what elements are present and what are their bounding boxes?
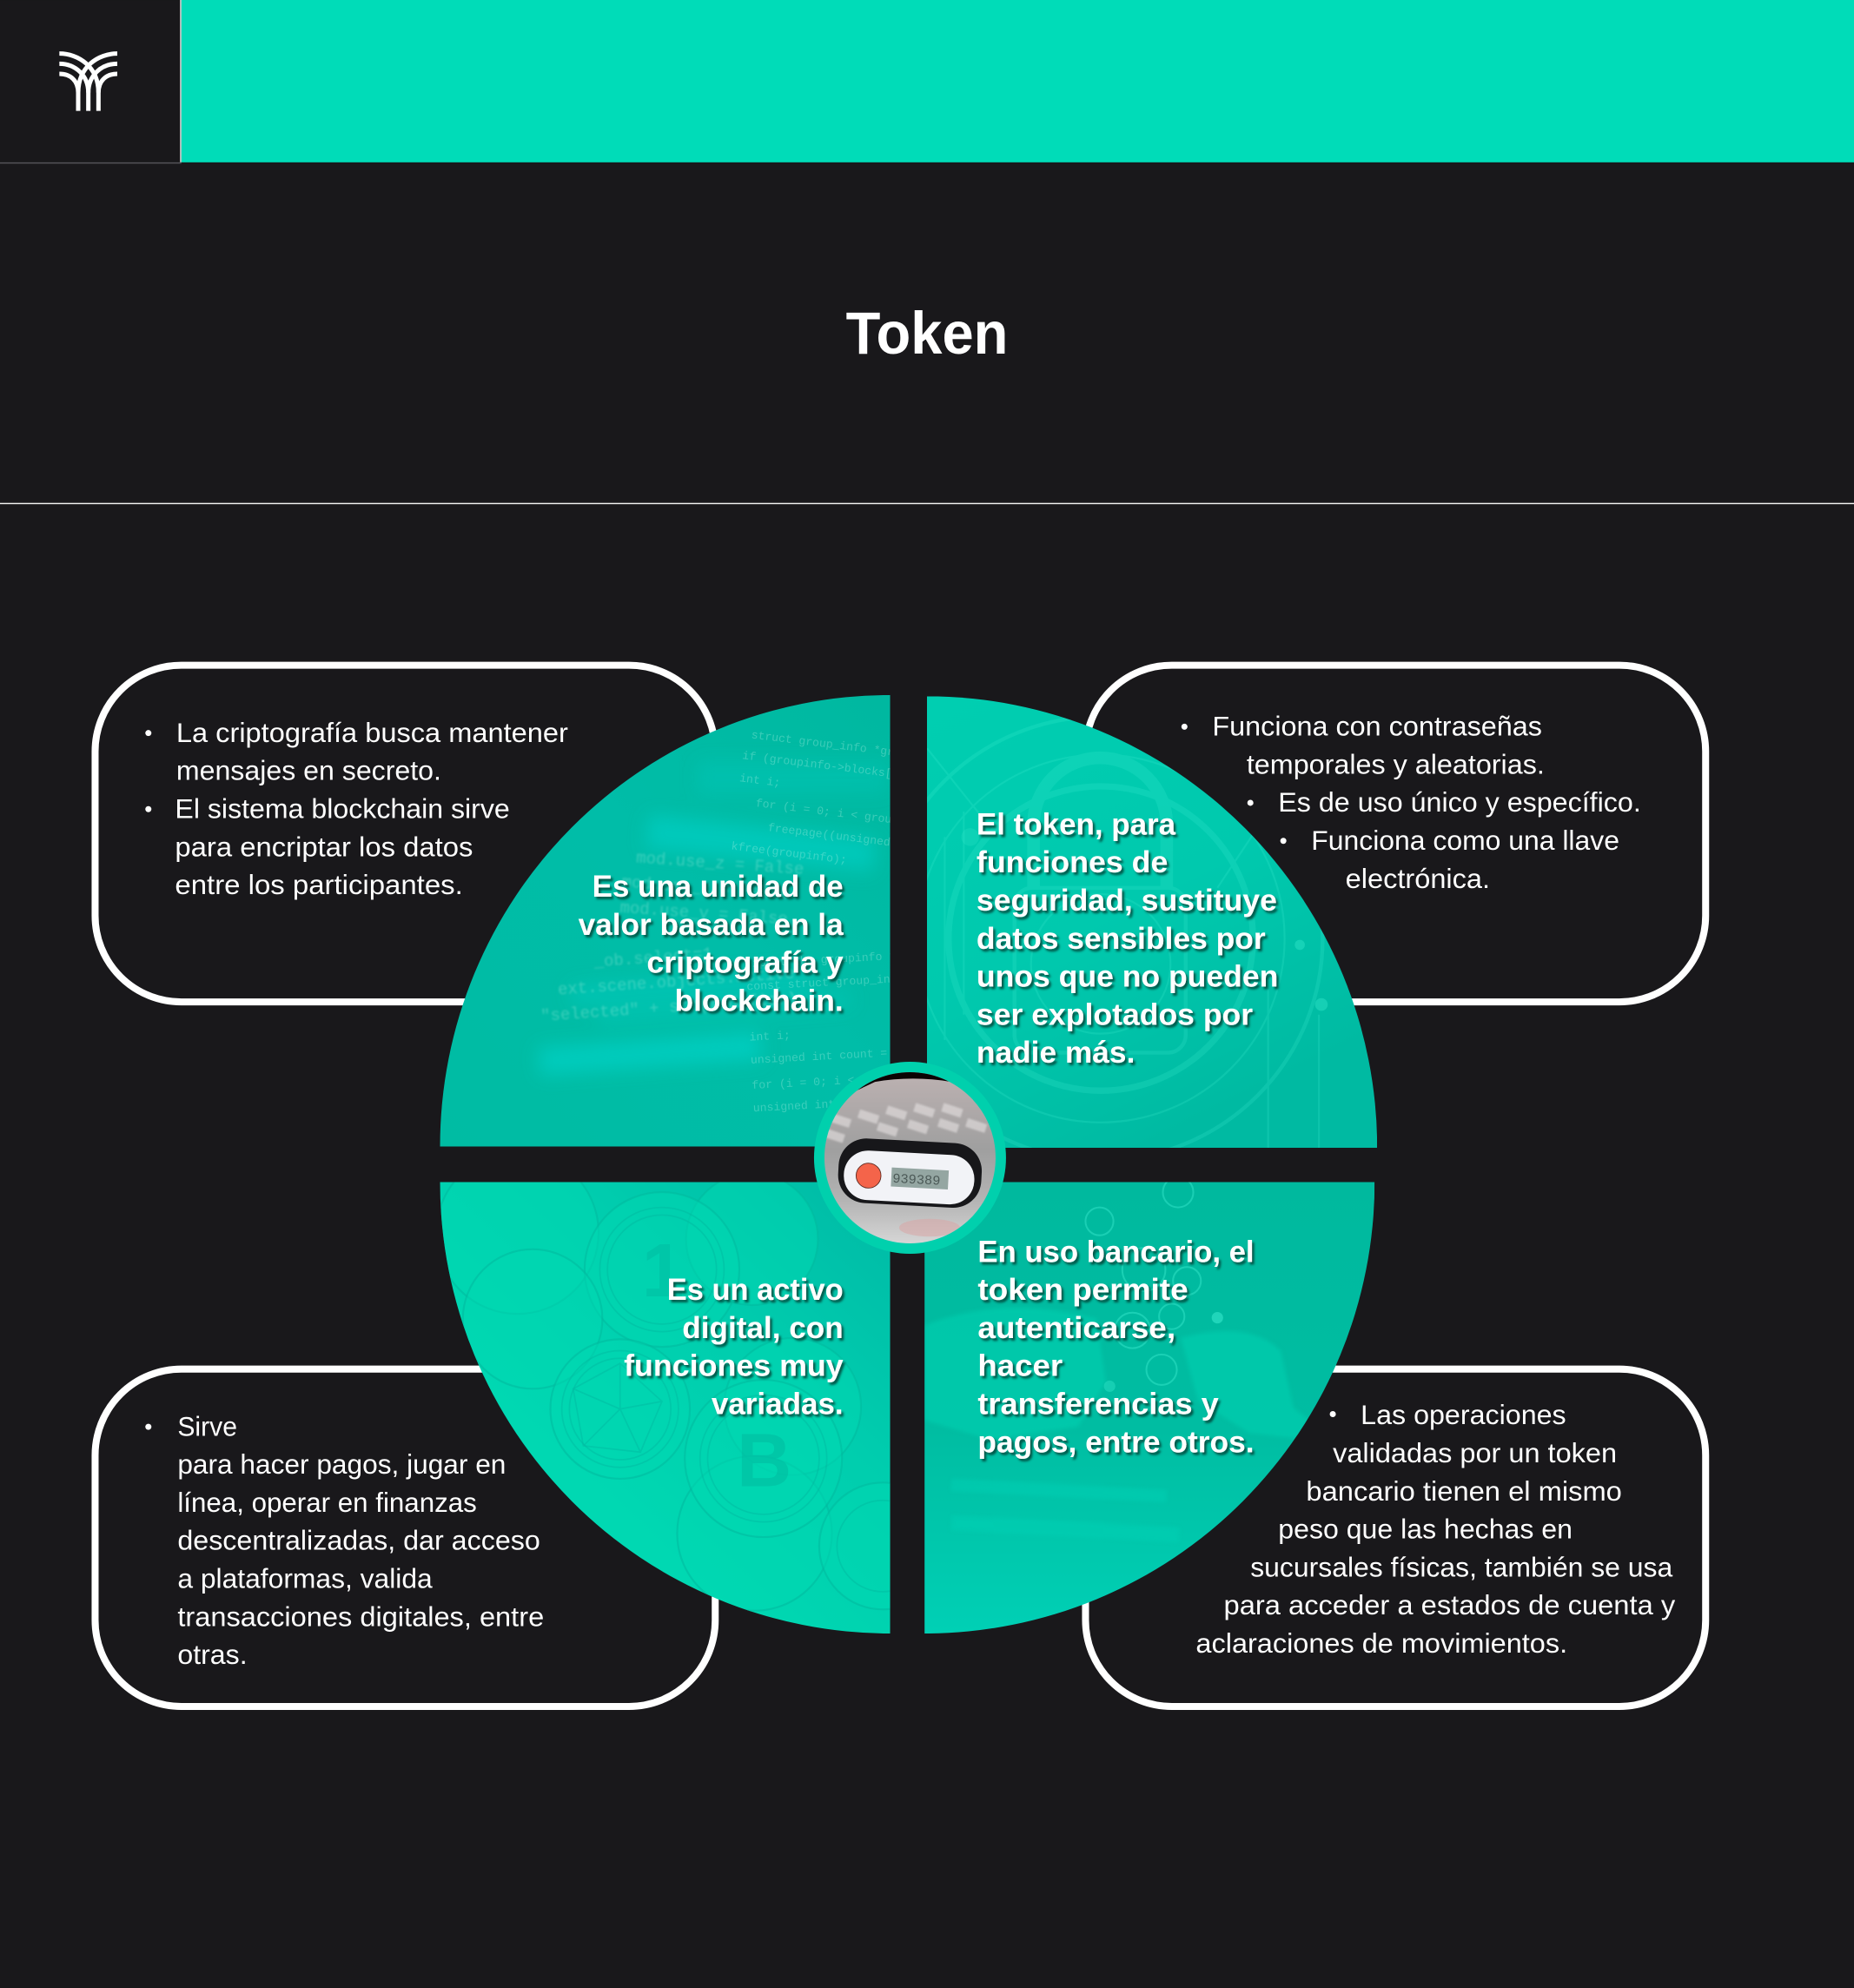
quadrant label: bottom-left: digital, con xyxy=(682,1311,844,1345)
text block: top-right box bullets: Funciona con contraseñas xyxy=(1212,712,1542,742)
text block: top-right box bullets: temporales y aleatorias. xyxy=(1247,749,1545,779)
panel: quadrant top-left, code background: for (i = 0; i < group_info->nblocks; i++) { xyxy=(752,1064,1046,1092)
panel: quadrant bottom-right, hands and coins background xyxy=(924,1177,1374,1633)
header: logo cell and teal band xyxy=(0,0,1854,163)
text block: top-right box bullets: Es de uso único y específico. xyxy=(1278,787,1641,818)
text block: top-left box bullets: mensajes en secreto. xyxy=(176,756,441,786)
quadrant label: top-right: datos sensibles por xyxy=(977,922,1266,956)
panel: quadrant top-left, code background: "selected" + str(modifier) xyxy=(540,990,798,1026)
panel: quadrant top-left, code background: int i; xyxy=(749,1029,791,1044)
panel: bottom-right outlined box xyxy=(1085,1369,1705,1706)
quadrant label: bottom-right: transferencias y xyxy=(977,1388,1219,1421)
text block: top-left box bullets: El sistema blockchain sirve xyxy=(175,793,510,824)
panel: quadrant top-left, code background: int i; xyxy=(738,772,781,790)
text block: bottom-right box bullets: sucursales físicas, también se usa xyxy=(1250,1552,1673,1582)
panel: quadrant top-left, code background: struct group_info *group_info) xyxy=(751,728,956,766)
quadrant label: bottom-right: hacer xyxy=(977,1349,1063,1383)
panel: quadrant top-left, code background: mod.use_z = False xyxy=(635,849,805,879)
panel: quadrant top-left, code background: mod.use_x = False xyxy=(621,873,790,904)
quadrant label: top-right: El token, para xyxy=(977,807,1176,841)
panel: quadrant top-left, code background: unsigned int cpcount = min(NGROUPS, count); xyxy=(752,1087,1047,1115)
panel: quadrant top-left, code background: for (i = 0; i < group_info->nblocks; i++) xyxy=(755,797,1035,844)
quadrant label: bottom-right: En uso bancario, el xyxy=(977,1235,1255,1269)
quadrant label: bottom-right: autenticarse, xyxy=(977,1311,1175,1345)
text block: bottom-right box bullets: para acceder a estados de cuenta y xyxy=(1224,1590,1675,1620)
panel: quadrant top-left, code background: kfree(groupinfo); xyxy=(731,840,847,867)
center circle: token device photo xyxy=(814,1062,1006,1254)
text block: bottom-right box bullets: peso que las hechas en xyxy=(1278,1514,1573,1545)
quadrant label: bottom-right: pagos, entre otros. xyxy=(977,1425,1255,1459)
quadrant label: bottom-left: variadas. xyxy=(712,1388,844,1421)
panel: quadrant top-left, code background: export the groupinfo to user-space array */ xyxy=(745,942,1040,971)
panel: quadrant top-left, code background: _ob.select=1 xyxy=(593,944,713,972)
panel: quadrant bottom-left, crypto coins background: 1 xyxy=(642,1228,684,1313)
quadrant label: top-left: Es una unidad de xyxy=(593,870,844,904)
panel: quadrant top-left, code background xyxy=(440,695,1099,1147)
quadrant label: top-right: seguridad, sustituye xyxy=(977,884,1277,918)
text block: bottom-right box bullets: aclaraciones de movimientos. xyxy=(1195,1628,1567,1659)
text block: top-left box bullets: para encriptar los datos xyxy=(175,832,473,862)
quadrant label: top-right: unos que no pueden xyxy=(977,960,1278,994)
text block: bottom-left box bullets: para hacer pagos, jugar en xyxy=(177,1449,506,1480)
text block: top-right box bullets: electrónica. xyxy=(1346,864,1490,894)
text block: bottom-left box bullets: a plataformas, valida xyxy=(177,1563,433,1594)
panel: quadrant top-left, code background: if (groupinfo->blocks[0] != group_info->small_block) xyxy=(742,749,1096,805)
panel: top-right outlined box xyxy=(1085,666,1705,1002)
text block: bottom-left box bullets: otras. xyxy=(177,1640,248,1670)
text block: bottom-left box bullets: descentralizadas, dar acceso xyxy=(177,1526,540,1556)
quadrant label: top-left: criptografía y xyxy=(646,946,844,980)
panel: bottom-left outlined box xyxy=(95,1369,715,1706)
text block: top-left box bullets xyxy=(145,718,568,900)
quadrant label: bottom-right xyxy=(977,1235,1255,1459)
panel: quadrant bottom-left, crypto coins background: B xyxy=(737,1418,791,1503)
quadrant label: top-right: nadie más. xyxy=(977,1036,1135,1070)
text block: bottom-right box bullets: validadas por un token xyxy=(1333,1438,1617,1468)
panel: quadrant top-left, code background: mod.use_y = False xyxy=(619,898,788,929)
text block: top-right box bullets: Funciona como una llave xyxy=(1311,825,1619,856)
panel: quadrant bottom-left, crypto coins background xyxy=(440,1182,891,1633)
text block: bottom-right box bullets xyxy=(1195,1400,1675,1659)
panel: quadrant top-left, code background: const struct group_info *group_info) xyxy=(746,968,993,993)
panel: quadrant top-left, code background: freepage((unsigned long)groupinfo->blocks[i]); xyxy=(767,821,1082,872)
quadrant label: top-left xyxy=(579,870,844,1017)
icon: token body xyxy=(837,1137,983,1209)
quadrant label: top-right xyxy=(977,807,1278,1070)
quadrant label: top-left: valor basada en la xyxy=(579,908,844,942)
panel: quadrant top-left, code background: ext.scene.objects.active xyxy=(557,964,795,1000)
text block: bottom-right box bullets: Las operaciones xyxy=(1361,1400,1566,1430)
panel: quadrant top-right, security lock background xyxy=(927,697,1377,1148)
quadrant label: bottom-right: token permite xyxy=(977,1273,1189,1307)
quadrant label: bottom-left xyxy=(624,1273,844,1421)
text block: top-left box bullets: La criptografía busca mantener xyxy=(176,718,568,748)
text block: bottom-left box bullets: línea, operar en finanzas xyxy=(177,1488,477,1518)
text block: bottom-left box bullets xyxy=(145,1411,544,1670)
text block: bottom-left box bullets: transacciones digitales, entre xyxy=(177,1601,544,1632)
text block: bottom-left box bullets: Sirve xyxy=(177,1411,237,1441)
panel: quadrant top-left, code background: unsigned int count = groupinfo->ngroups; xyxy=(751,1039,1024,1067)
quadrant label: top-left: blockchain. xyxy=(675,984,844,1017)
text block: bottom-right box bullets: bancario tienen el mismo xyxy=(1306,1476,1622,1507)
icon: logo xyxy=(59,54,117,111)
quadrant label: top-right: ser explotados por xyxy=(977,997,1254,1031)
title: Token xyxy=(846,300,1008,367)
panel: top-left outlined box xyxy=(95,666,715,1002)
quadrant label: bottom-left: Es un activo xyxy=(667,1273,844,1307)
quadrant label: bottom-left: funciones muy xyxy=(624,1349,844,1383)
text block: top-left box bullets: entre los participantes. xyxy=(175,870,463,900)
center circle: token device photo: 939389 xyxy=(892,1171,941,1189)
quadrant label: top-right: funciones de xyxy=(977,845,1168,879)
text block: top-right box bullets xyxy=(1182,712,1641,894)
